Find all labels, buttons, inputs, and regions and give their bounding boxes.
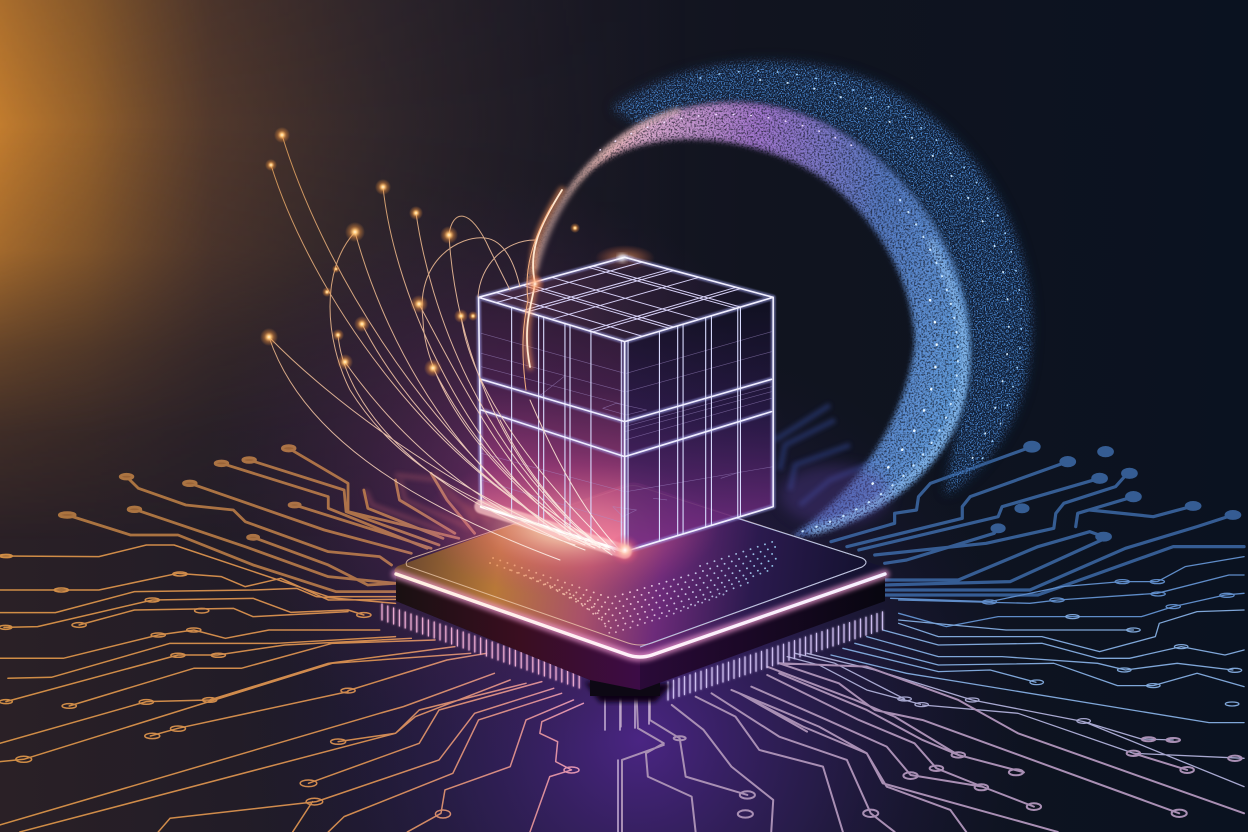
chip top face xyxy=(394,482,885,657)
central vertical traces below chip xyxy=(605,697,649,832)
wireframe cube xyxy=(479,257,773,552)
chip pins: left row xyxy=(382,604,579,688)
cube glow lines xyxy=(479,257,773,552)
circuit traces: right, blurred blue traces xyxy=(831,442,1244,595)
cube faces xyxy=(479,257,773,552)
circuit traces: right, sharp pale blue traces xyxy=(831,557,1244,723)
cube grid: left and right faces xyxy=(481,307,772,550)
cube bright base edge glow xyxy=(481,507,625,552)
chip body xyxy=(396,574,885,702)
circuit traces: left, sharp near traces xyxy=(0,545,583,832)
circuit traces: left, blurred far traces xyxy=(59,446,475,592)
luminous tail of band entering cube xyxy=(523,190,562,390)
cube thin detail lines xyxy=(481,332,773,523)
circuit traces: lower right, lilac traces xyxy=(621,653,1244,832)
cube bright base edge xyxy=(481,507,625,552)
orbital ring: outer dark particles xyxy=(612,62,1031,495)
orbital ring: inner luminous band xyxy=(523,103,970,538)
faint blurred traces behind cube and spiral xyxy=(365,405,875,535)
base sparkle at cube corner xyxy=(525,254,641,566)
chip dot matrix xyxy=(490,540,778,634)
cube outer edges xyxy=(479,257,773,552)
fibers converging on cube base xyxy=(269,135,620,560)
fiber end nodes xyxy=(260,127,580,377)
cube glow at base xyxy=(420,245,720,597)
background gradient xyxy=(0,0,963,832)
chip pins: right row xyxy=(668,612,882,700)
cube grid: top face xyxy=(496,262,740,336)
chip glowing edge xyxy=(396,574,885,657)
